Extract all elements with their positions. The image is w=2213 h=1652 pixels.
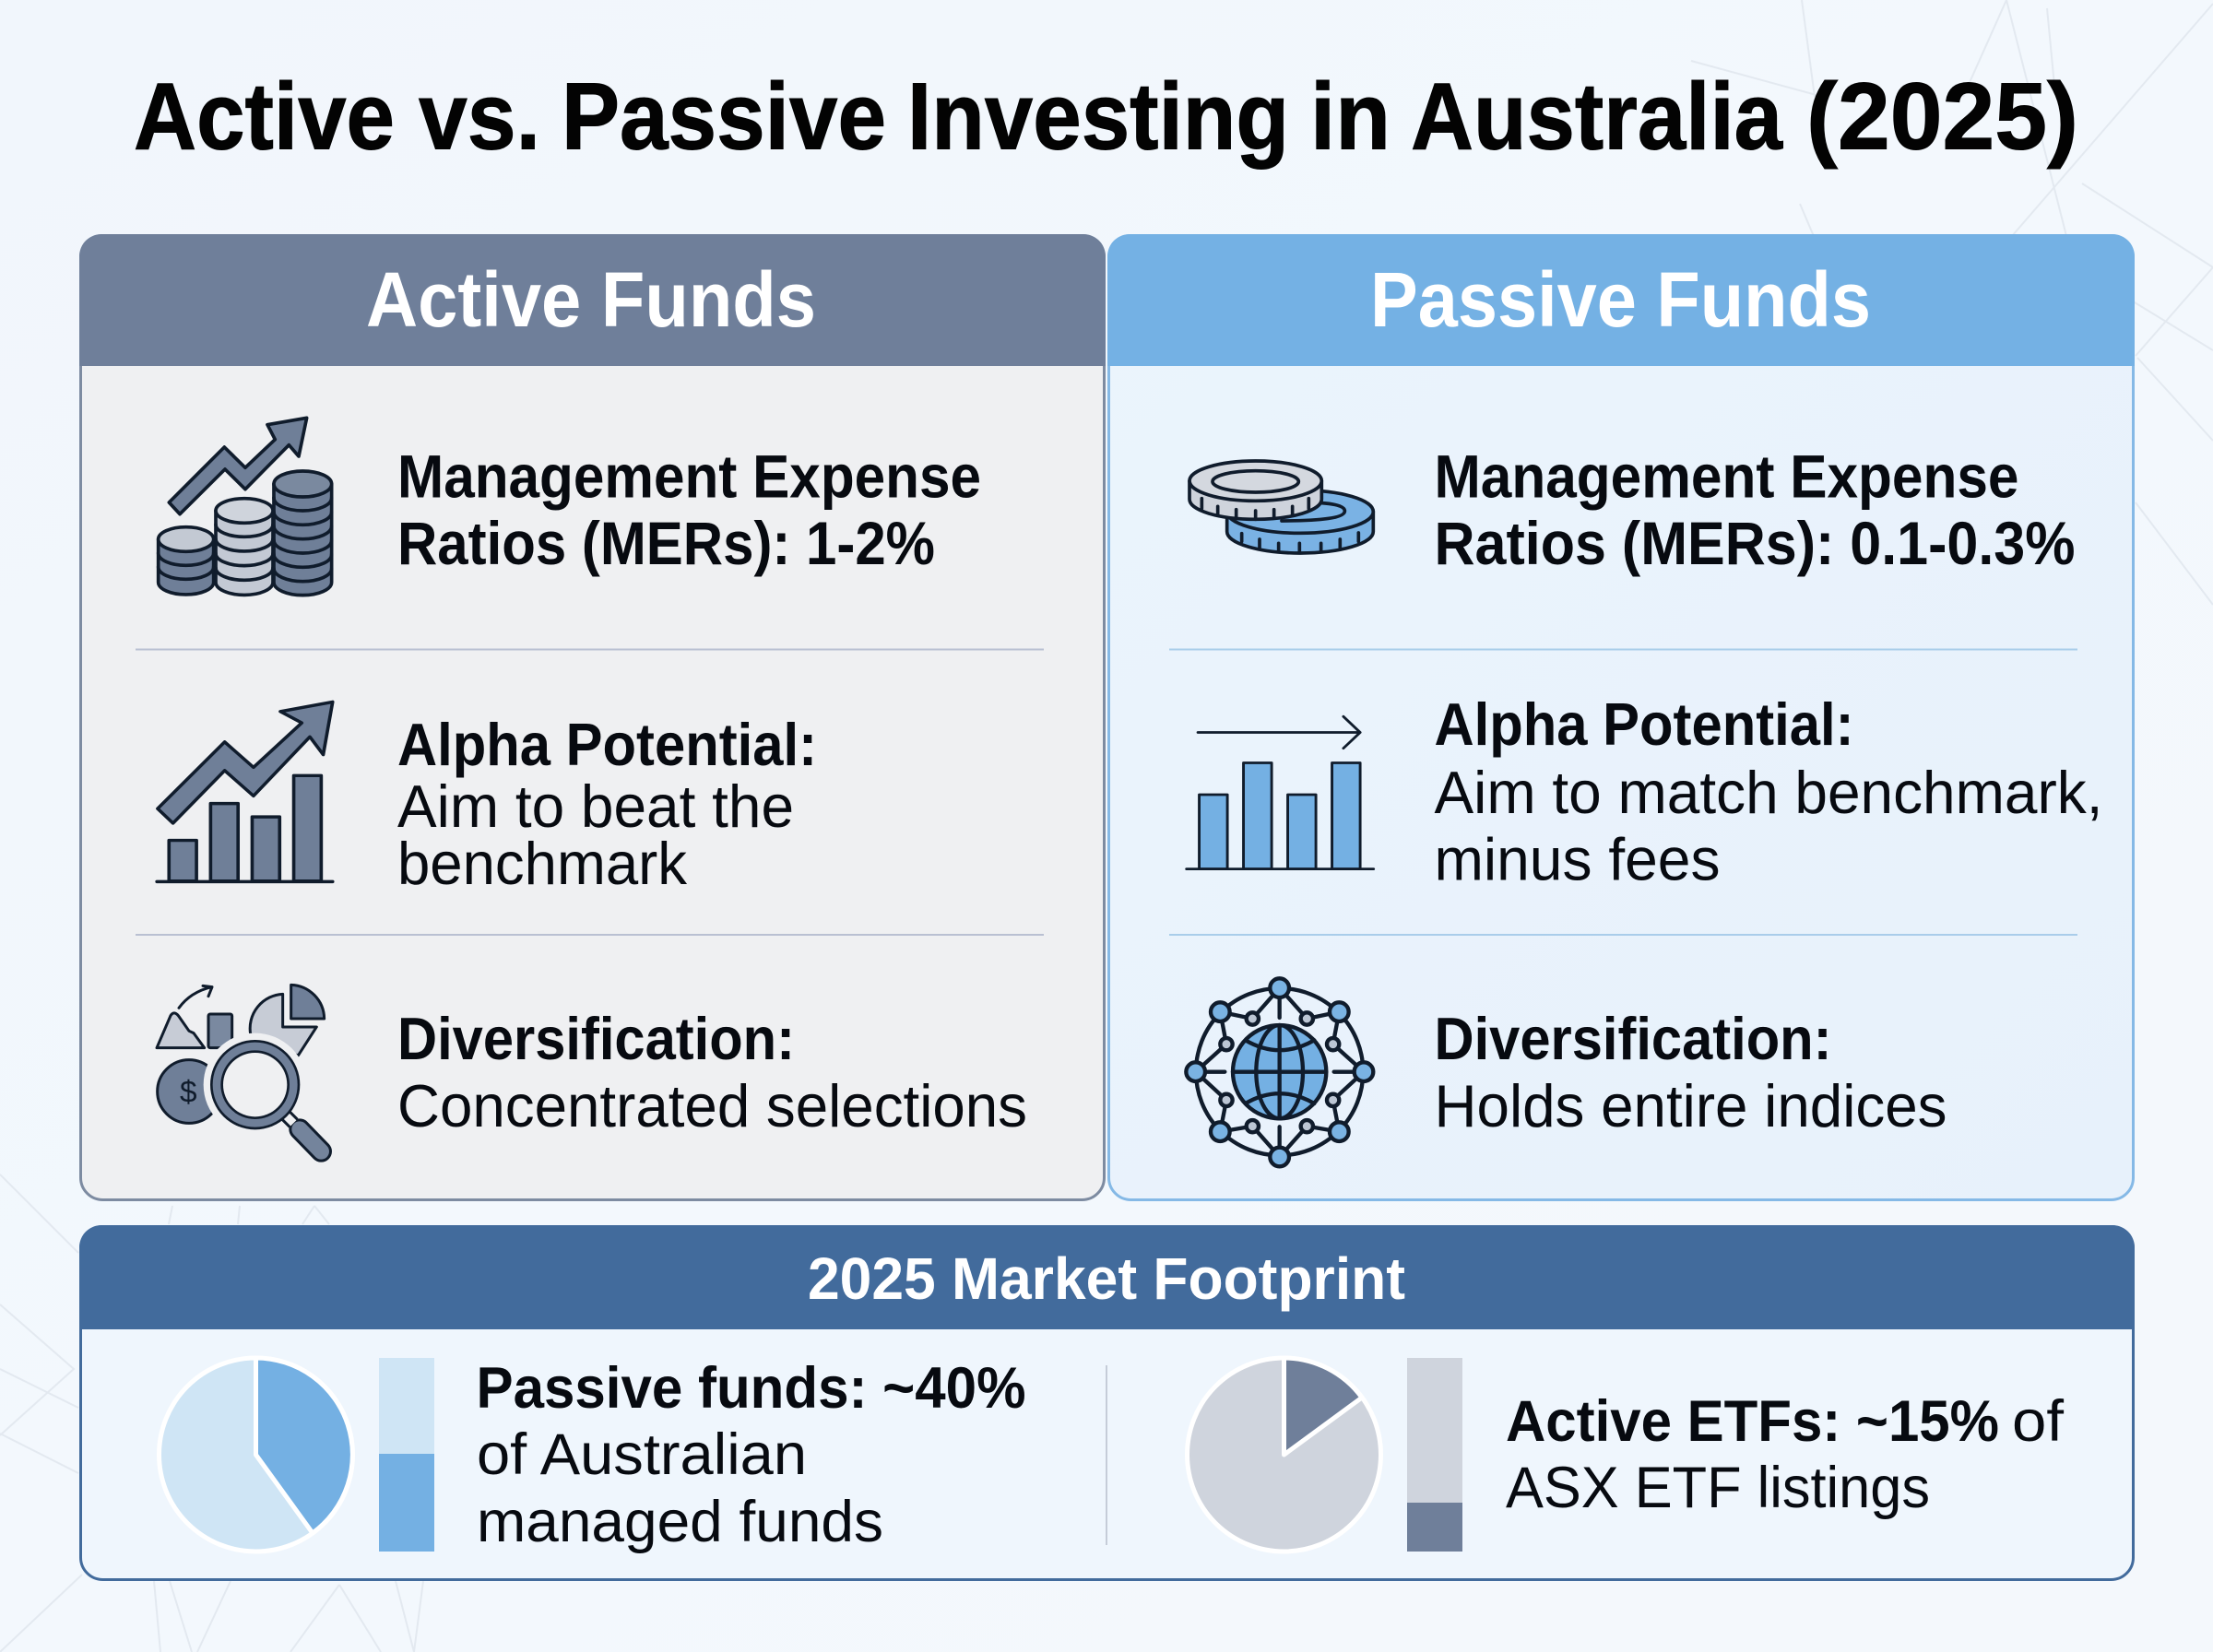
icon: coin stacks with rising arrow (159, 418, 332, 596)
text: passive share: of Australian (477, 1422, 807, 1487)
chart: passive share bar (379, 1358, 434, 1552)
text: active ETF share: Active ETFs: ~15% (1506, 1389, 1999, 1454)
text: active alpha: Alpha Potential: (397, 711, 817, 778)
passive heading: Passive Funds (1370, 256, 1871, 343)
text: passive diversification: Diversification: (1435, 1005, 1831, 1072)
chart: passive share pie (159, 1358, 352, 1552)
title: in (1310, 63, 1391, 170)
chart: active ETF bar (1407, 1358, 1462, 1552)
icon: level arrow over bars (1187, 716, 1374, 869)
text: passive diversification: Holds entire indices (1435, 1072, 1947, 1139)
text: active MER: Management Expense (397, 442, 981, 511)
footprint heading: 2025 Market Footprint (808, 1245, 1405, 1312)
icon: globe network (1186, 978, 1373, 1166)
text: active diversification: Concentrated selections (397, 1072, 1027, 1139)
footprint header bar (79, 1225, 2135, 1329)
text: passive diversification (1435, 1005, 1947, 1139)
text: passive alpha: Aim to match benchmark, (1435, 759, 2102, 826)
text: active diversification (397, 1005, 1027, 1139)
text: passive share: Passive funds: ~40% (476, 1356, 1025, 1421)
text: active alpha: benchmark (397, 830, 687, 897)
icon: two flat coins (1189, 461, 1373, 553)
text: passive share (476, 1356, 1025, 1554)
chart: active ETF pie (1188, 1358, 1381, 1552)
dollar sign: $ (180, 1075, 197, 1109)
text: active ETF share: ASX ETF listings (1506, 1456, 1930, 1520)
panel: passive funds (1107, 234, 2135, 1200)
text: active MER (397, 442, 981, 577)
active row dividers (136, 649, 1044, 935)
active heading: Active Funds (366, 256, 816, 343)
text: active diversification: Diversification: (397, 1005, 795, 1072)
title: vs. (419, 63, 540, 170)
text: passive MER (1435, 442, 2075, 577)
panel: active funds (79, 234, 1106, 1200)
passive header bar (1107, 234, 2135, 366)
panel: 2025 market footprint (79, 1225, 2135, 1580)
text: active ETF share: of (2012, 1389, 2065, 1454)
text: passive alpha (1435, 690, 2102, 892)
text: passive MER: Management Expense (1435, 442, 2019, 511)
title: Investing (907, 63, 1289, 170)
title: Active (134, 63, 395, 170)
icon: magnifier over assets (157, 985, 325, 1151)
icon: bars with rising arrow (157, 702, 333, 881)
text: active alpha (397, 711, 817, 897)
active header bar (79, 234, 1106, 366)
text: passive alpha: minus fees (1435, 826, 1721, 892)
text: active MER: Ratios (MERs): 1-2% (397, 509, 935, 577)
title: Passive (562, 63, 886, 170)
title: Australia (1411, 63, 1783, 170)
text: passive alpha: Alpha Potential: (1435, 690, 1853, 758)
title: (2025) (1806, 63, 2078, 170)
passive row dividers (1169, 649, 2077, 935)
text: active ETF share (1506, 1389, 2065, 1520)
text: passive share: managed funds (477, 1490, 883, 1554)
text: passive MER: Ratios (MERs): 0.1-0.3% (1435, 509, 2075, 577)
text: active alpha: Aim to beat the (397, 773, 794, 840)
title (134, 63, 2078, 170)
